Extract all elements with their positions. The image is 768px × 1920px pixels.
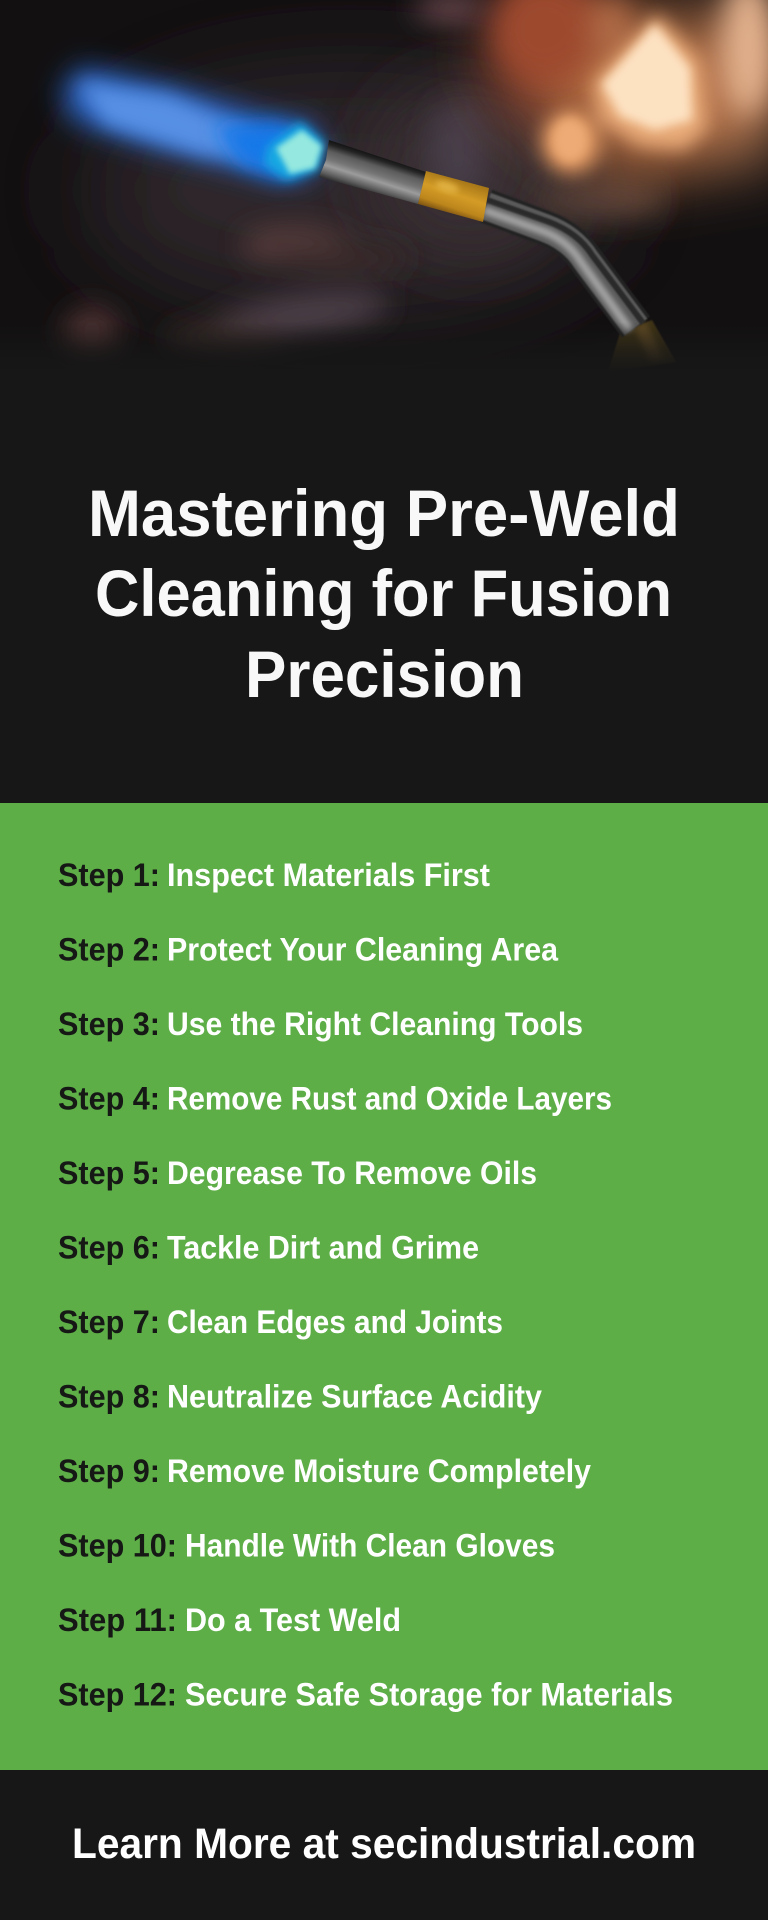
step 11: Step 11: — [58, 1602, 177, 1638]
step 5: Degrease To Remove Oils — [167, 1155, 537, 1191]
step 9: Step 9: — [58, 1453, 160, 1489]
step 11 — [58, 1602, 401, 1638]
step 1: Inspect Materials First — [167, 857, 490, 893]
title — [88, 477, 680, 711]
photo: welding torch with blue flame — [36, 0, 768, 362]
step 2: Step 2: — [58, 932, 160, 968]
step 6: Tackle Dirt and Grime — [167, 1230, 479, 1266]
step 1: Step 1: — [58, 857, 160, 893]
footer call to action: Learn More at secindustrial.com — [72, 1820, 696, 1868]
gold ring — [418, 171, 489, 222]
title: Cleaning for Fusion — [95, 557, 672, 630]
step 8: Neutralize Surface Acidity — [167, 1378, 542, 1414]
step 12: Step 12: — [58, 1676, 177, 1712]
title: Precision — [245, 638, 524, 711]
step 3: Use the Right Cleaning Tools — [167, 1006, 583, 1042]
step 3: Step 3: — [58, 1006, 160, 1042]
blurred lumps — [64, 100, 665, 358]
warm bokeh lights — [490, 0, 768, 180]
step 4: Step 4: — [58, 1080, 160, 1116]
step 9: Remove Moisture Completely — [167, 1453, 591, 1489]
step 6: Step 6: — [58, 1230, 160, 1266]
brass end — [614, 320, 673, 360]
title: Mastering Pre-Weld — [88, 477, 680, 550]
step 12: Secure Safe Storage for Materials — [185, 1676, 673, 1712]
step 11: Do a Test Weld — [185, 1602, 401, 1638]
step 4: Remove Rust and Oxide Layers — [167, 1080, 612, 1116]
step 7: Step 7: — [58, 1304, 160, 1340]
flame — [60, 66, 324, 182]
step 10: Handle With Clean Gloves — [185, 1528, 555, 1564]
step 2: Protect Your Cleaning Area — [167, 932, 559, 968]
step 8: Step 8: — [58, 1378, 160, 1414]
step 10: Step 10: — [58, 1528, 177, 1564]
step 10 — [58, 1528, 555, 1564]
panel: steps — [0, 803, 768, 1770]
fade to dark — [65, 324, 676, 371]
step 7: Clean Edges and Joints — [167, 1304, 503, 1340]
torch barrel — [319, 140, 426, 204]
step 5: Step 5: — [58, 1155, 160, 1191]
torch tube — [484, 200, 676, 372]
photo background — [0, 0, 768, 372]
